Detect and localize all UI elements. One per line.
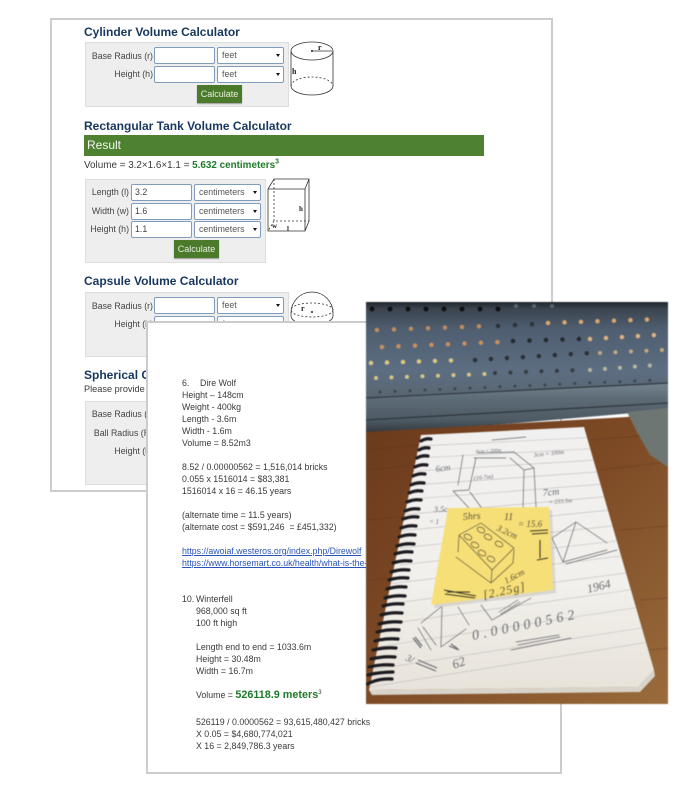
text block: alternate estimates: (alternate cost = $591,246 = £451,332) [182, 522, 337, 532]
text block: winterfell calculations: X 16 = 2,849,786.3 years [196, 741, 295, 751]
text block: dire wolf calculations: 0.055 x 1516014 = $83,381 [182, 474, 289, 484]
winterfell volume result: Volume = 526118.9 meters3 [196, 689, 322, 701]
icon: capsule diagram: r [301, 304, 305, 313]
sticky note with brick sketch: 3.2cm [494, 522, 520, 541]
icon: capsule diagram [290, 292, 334, 321]
handwritten numbers: 62 [450, 653, 468, 672]
text block: winterfell dimensions: Height = 30.48m [196, 654, 261, 664]
form: tank inputs: Calculate [178, 244, 215, 254]
source links: https://awoiaf.westeros.org/index.php/Direwolf [182, 546, 361, 556]
text block: winterfell dimensions: 10. [182, 594, 194, 604]
desk rail [366, 383, 668, 436]
pen sketches on the page [418, 437, 617, 650]
form: tank inputs: centimeters [199, 187, 244, 197]
text block: winterfell dimensions: 968,000 sq ft [196, 606, 247, 616]
sticky note with brick sketch [431, 507, 556, 608]
spiral binding [367, 439, 431, 684]
text block: winterfell calculations: 526119 / 0.0000562 = 93,615,480,427 bricks [196, 717, 370, 727]
text block: dire wolf calculations: 1516014 x 16 = 46.15 years [182, 486, 291, 496]
form: capsule inputs [85, 292, 289, 357]
form: spherical cap inputs: Height (h) [114, 446, 153, 456]
form: tank inputs [85, 179, 266, 263]
text block: winterfell dimensions [182, 594, 311, 676]
icon: cylinder diagram [290, 42, 334, 96]
form: tank inputs: Width (w) [92, 206, 129, 216]
form: cylinder inputs: feet [222, 69, 237, 79]
icon: rectangular tank diagram: h [299, 205, 303, 213]
handwritten numbers: = 233.5m [549, 498, 573, 506]
handwritten numbers [403, 449, 612, 672]
form: tank inputs: 3.2 [135, 187, 147, 197]
wooden desk [366, 412, 668, 704]
text block: winterfell dimensions: Length end to end = 1033.6m [196, 642, 311, 652]
perforated metal panel [366, 302, 668, 400]
form: cylinder inputs: Base Radius (r) [92, 51, 153, 61]
text block: dire wolf dimensions: Weight - 400kg [182, 402, 241, 412]
text block: winterfell calculations [196, 717, 370, 751]
grey desk mat [627, 408, 668, 467]
source links [182, 546, 366, 568]
form: spherical cap inputs: Base Radius (r) [92, 409, 153, 419]
panel: handwritten notes document [146, 321, 562, 774]
form: spherical cap inputs [85, 401, 289, 485]
result formula: Volume = 3.2×1.6×1.1 = 5.632 centimeters3 [84, 159, 279, 171]
result bar [84, 135, 484, 156]
heading: rectangular tank calculator: Rectangular Tank Volume Calculator [84, 119, 292, 133]
heading: cylinder calculator: Cylinder Volume Calculator [84, 25, 240, 39]
text block: winterfell dimensions: Winterfell [196, 594, 233, 604]
sticky note with brick sketch: 11 [504, 512, 513, 523]
scribbled-out marks [413, 637, 459, 671]
form: cylinder inputs [85, 42, 289, 107]
form: tank inputs: centimeters [199, 224, 244, 234]
text block: winterfell dimensions: 100 ft high [196, 618, 237, 628]
text block: alternate estimates: (alternate time = 11.5 years) [182, 510, 292, 520]
form: tank inputs: 1.6 [135, 206, 147, 216]
icon: rectangular tank diagram: w [272, 222, 278, 230]
panel: calculator screenshot [50, 18, 553, 492]
handwritten numbers: 1964 [585, 577, 612, 596]
text block: dire wolf dimensions: Dire Wolf [200, 378, 236, 388]
form: tank inputs: Length (l) [92, 187, 129, 197]
icon: rectangular tank diagram: l [287, 225, 289, 233]
text block: dire wolf dimensions: Height – 148cm [182, 390, 244, 400]
instruction text: Please provide any two values below [84, 384, 235, 394]
handwritten numbers: (16-7m) [474, 473, 493, 482]
text block: dire wolf dimensions [182, 378, 251, 448]
form: cylinder inputs: feet [222, 50, 237, 60]
sticky note with brick sketch: = 15.6 [518, 519, 543, 529]
heading: spherical cap calculator: Spherical Cap Volume Calculator [84, 368, 272, 382]
form: capsule inputs: Base Radius (r) [92, 301, 153, 311]
text block: winterfell dimensions: Width = 16.7m [196, 666, 253, 676]
form: tank inputs: 1.1 [135, 224, 147, 234]
icon: cylinder diagram: h [292, 67, 297, 76]
handwritten numbers: 3/ [403, 652, 417, 667]
notebook [367, 427, 680, 695]
handwritten numbers: 6cm = 200m [476, 449, 502, 455]
photo: notebook sketch on desk [365, 301, 669, 705]
form: cylinder inputs: Height (h) [114, 69, 153, 79]
text block: dire wolf dimensions: 6. [182, 378, 189, 388]
text block: dire wolf dimensions: Volume = 8.52m3 [182, 438, 251, 448]
form: tank inputs: centimeters [199, 206, 244, 216]
icon: rectangular tank diagram [268, 178, 310, 233]
form: capsule inputs: feet [222, 319, 237, 329]
sticky note with brick sketch: 5hrs [462, 511, 481, 523]
form: capsule inputs: feet [222, 300, 237, 310]
text block: dire wolf dimensions: Width - 1.6m [182, 426, 232, 436]
brick sketch [456, 523, 514, 583]
sticky note with brick sketch: 1.6cm [502, 566, 527, 586]
handwritten numbers: 3.5cm [433, 505, 454, 514]
text block: dire wolf calculations: 8.52 / 0.00000562 = 1,516,014 bricks [182, 462, 328, 472]
handwritten numbers: 7cm [542, 487, 560, 499]
form: spherical cap inputs: Ball Radius (R) [94, 428, 153, 438]
result bar: Result [87, 138, 121, 152]
handwritten numbers: 3cm = 100m [533, 450, 565, 459]
handwritten numbers: 0.00000562 [471, 607, 580, 644]
icon: cylinder diagram: r [318, 43, 322, 52]
form: tank inputs: Height (h) [90, 224, 129, 234]
heading: capsule calculator: Capsule Volume Calculator [84, 274, 238, 288]
ruled lines [370, 437, 646, 688]
handwritten numbers: 6cm [435, 462, 452, 474]
text block: dire wolf calculations [182, 462, 328, 496]
text block: winterfell calculations: X 0.05 = $4,680,774,021 [196, 729, 293, 739]
form: capsule inputs: Height (h) [114, 319, 153, 329]
handwritten numbers: = 1 [429, 518, 439, 526]
text block: alternate estimates [182, 510, 337, 532]
form: cylinder inputs: Calculate [201, 89, 238, 99]
sticky note with brick sketch: [2.25g] [482, 579, 527, 602]
text block: dire wolf dimensions: Length - 3.6m [182, 414, 236, 424]
